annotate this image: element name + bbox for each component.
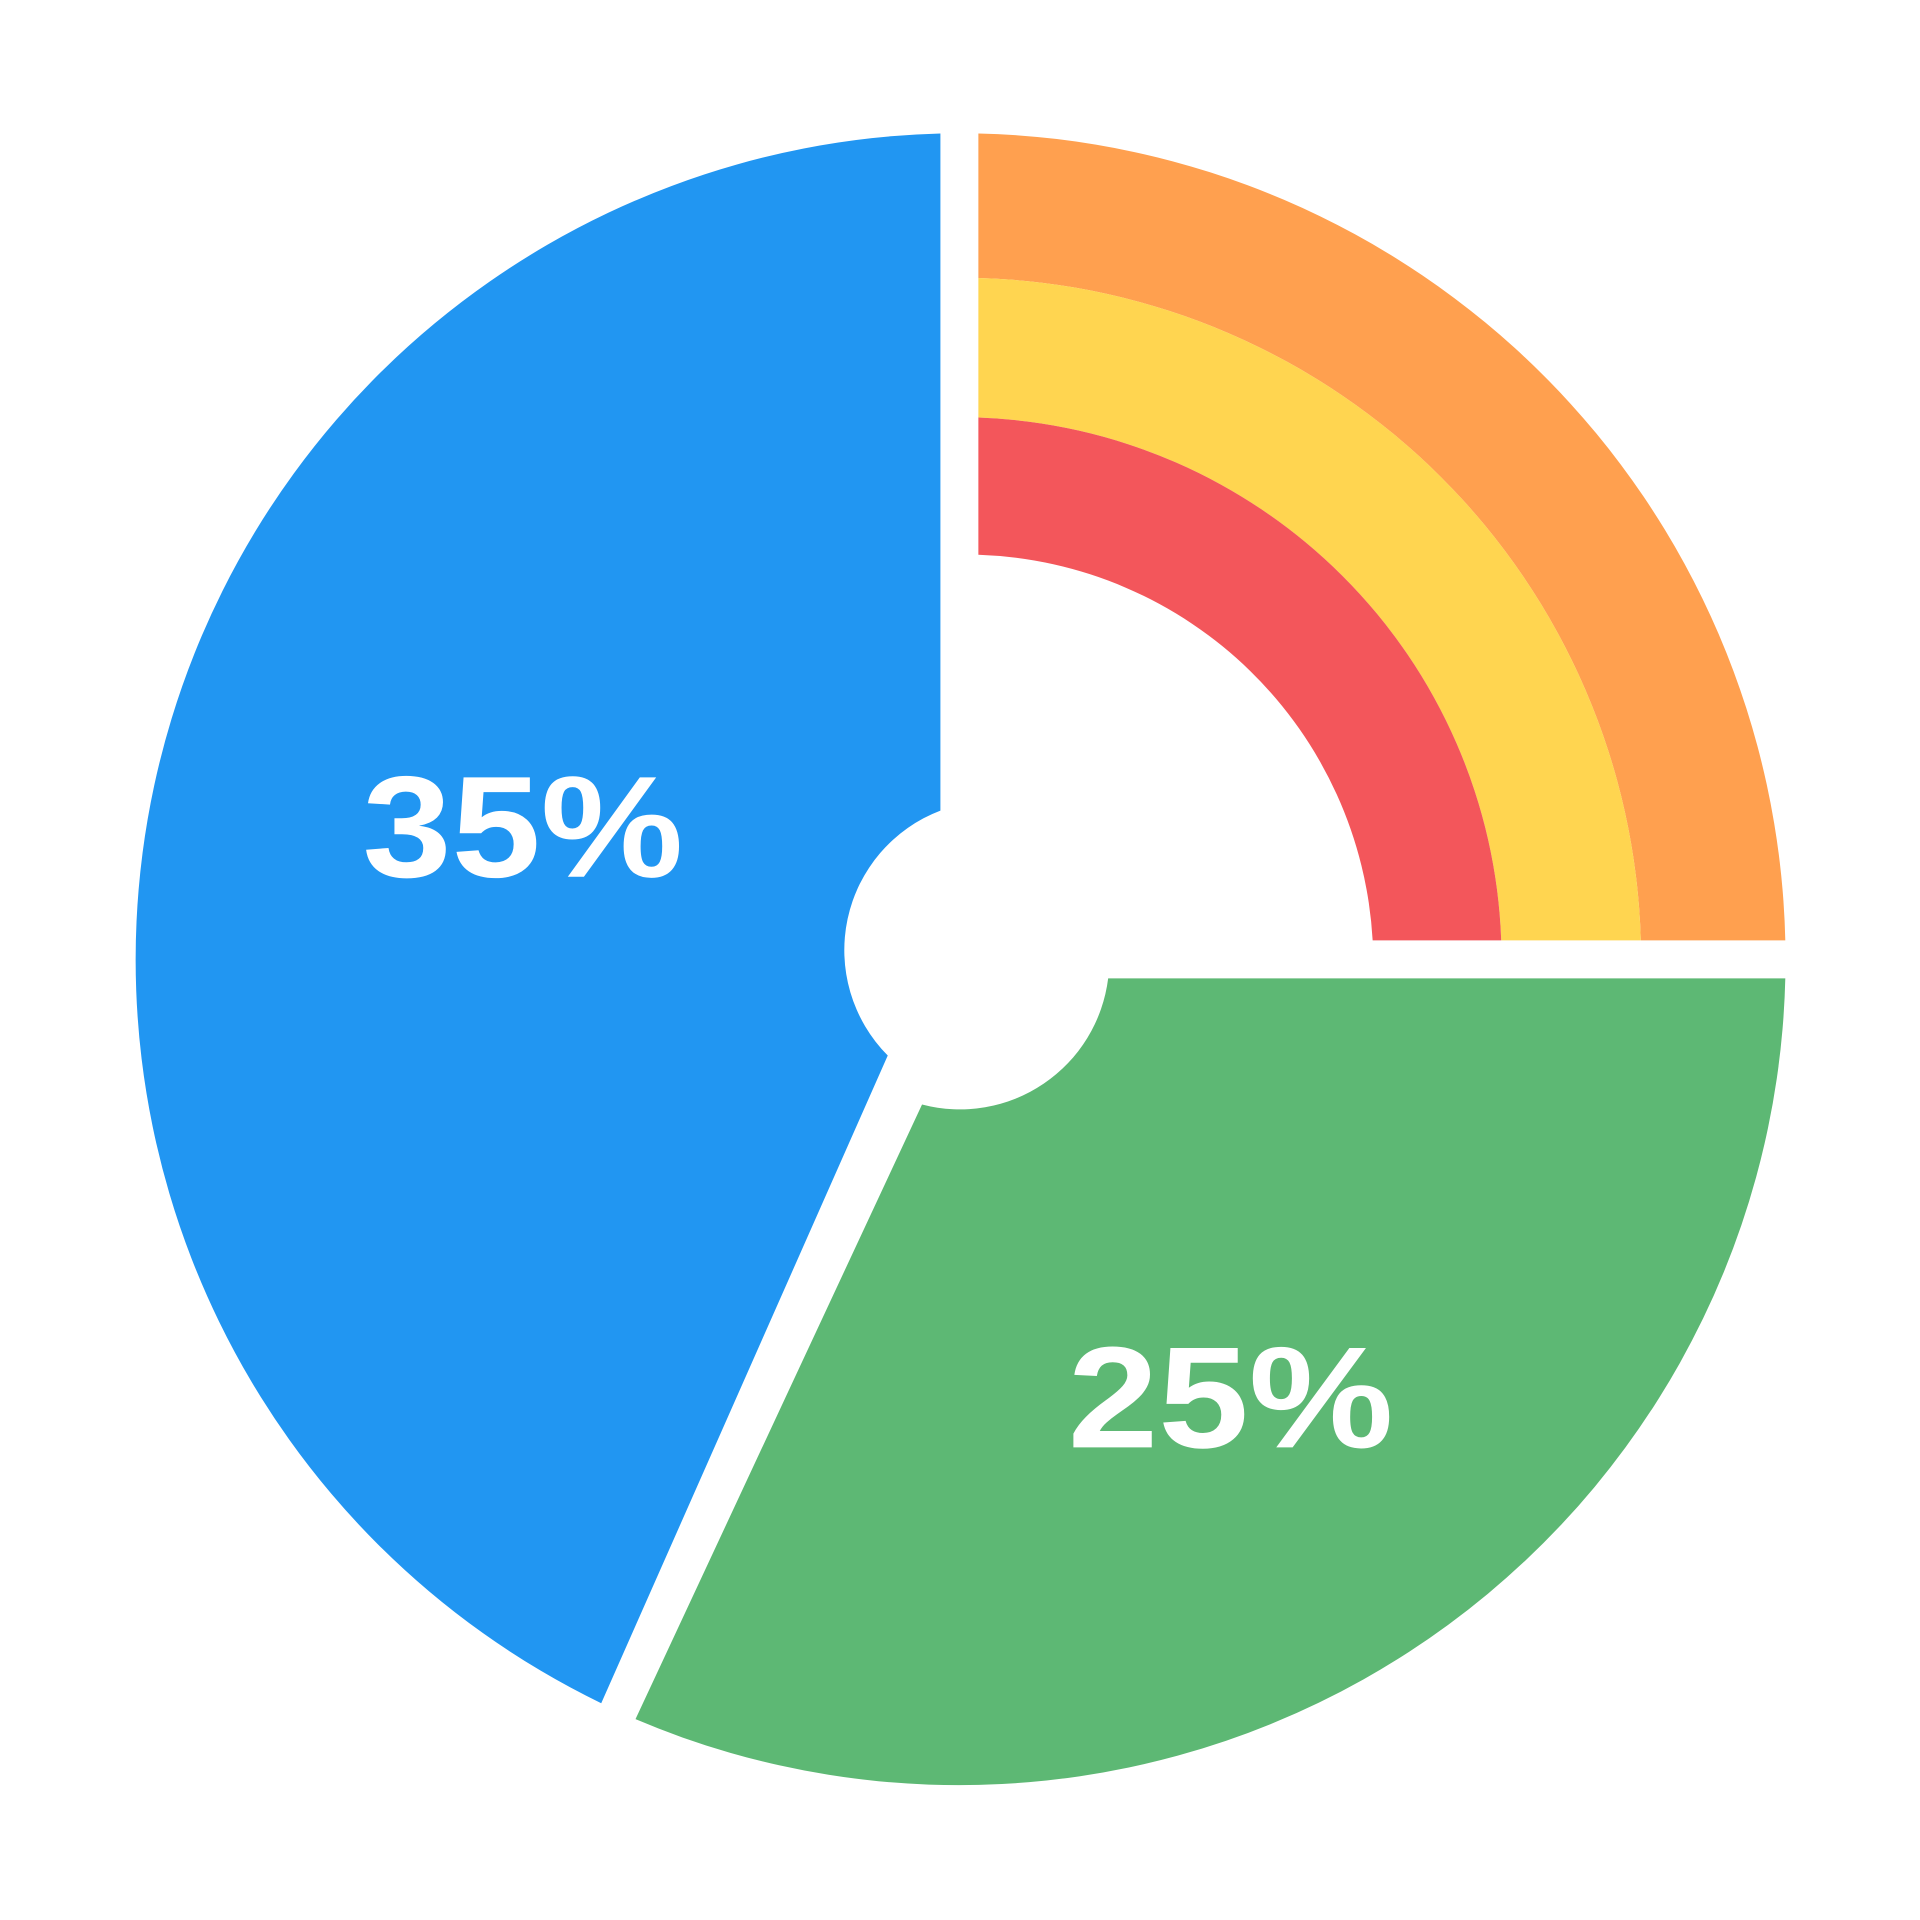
label: 35%: 35%: [362, 746, 683, 908]
segment: green 25%: [636, 978, 1785, 1785]
segment: red ring: [978, 418, 1501, 940]
segment: orange ring: [978, 133, 1785, 940]
segment: yellow ring: [978, 278, 1641, 940]
label: 25%: 25%: [1068, 1316, 1393, 1478]
